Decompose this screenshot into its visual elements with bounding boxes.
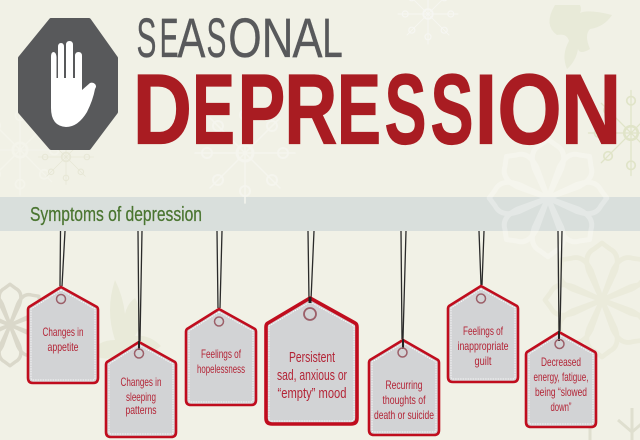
tag: decreased energy and fatigue: being “slowed	[535, 385, 587, 399]
tag: persistent sad, anxious or empty mood: “empty” mood	[278, 385, 346, 402]
tag: decreased energy and fatigue: down”	[550, 400, 572, 414]
title: depression: O	[497, 54, 562, 164]
title: depression: S	[385, 54, 426, 164]
tag: changes in sleeping patterns: sleeping	[126, 390, 156, 404]
tag: persistent sad, anxious or empty mood: sad, anxious or	[277, 367, 347, 384]
tag: decreased energy and fatigue: Decreased	[541, 355, 581, 369]
tag: feelings of inappropriate guilt: guilt	[474, 354, 492, 368]
tag: decreased energy and fatigue	[526, 231, 596, 427]
tag: recurring thoughts of death or suicide: Recurring	[386, 378, 422, 392]
title: depression: R	[284, 54, 337, 164]
icon: stop sign with hand	[20, 20, 116, 148]
tag: recurring thoughts of death or suicide: thoughts of	[382, 393, 426, 407]
tag: persistent sad, anxious or empty mood: Persistent	[289, 349, 336, 366]
title: depression: P	[238, 54, 285, 164]
title: seasonal: O	[228, 6, 262, 69]
heading: symptoms of depression: Symptoms of depression	[30, 204, 202, 226]
tag: feelings of hopelessness: Feelings of	[201, 347, 241, 361]
title: seasonal: S	[136, 6, 156, 69]
title: seasonal: S	[206, 6, 226, 69]
tag: changes in sleeping patterns: patterns	[126, 403, 156, 417]
tag: feelings of hopelessness: hopelessness	[197, 362, 245, 376]
title: seasonal: A	[177, 6, 206, 69]
tag: changes in appetite: appetite	[48, 340, 79, 354]
symptoms band	[0, 197, 640, 231]
tag: feelings of inappropriate guilt: Feelings of	[463, 324, 503, 338]
tag: feelings of inappropriate guilt	[448, 231, 518, 382]
tag: persistent sad, anxious or empty mood	[266, 231, 357, 424]
title: depression: I	[475, 54, 497, 164]
tag: feelings of inappropriate guilt: inappropriate	[458, 339, 509, 353]
tag: changes in sleeping patterns	[106, 231, 176, 437]
title: seasonal: A	[292, 6, 323, 69]
tag: recurring thoughts of death or suicide	[369, 231, 439, 435]
title: depression: N	[561, 54, 621, 164]
title: seasonal: L	[322, 6, 343, 69]
tag: recurring thoughts of death or suicide: death or suicide	[374, 408, 434, 422]
title: seasonal: E	[160, 6, 178, 69]
title: depression: S	[430, 54, 474, 164]
tag: decreased energy and fatigue: energy, fatigue,	[534, 370, 588, 384]
tag: changes in appetite	[28, 231, 98, 383]
tag: changes in appetite: Changes in	[42, 325, 84, 339]
tag: feelings of hopelessness	[186, 231, 256, 405]
title: seasonal: N	[262, 6, 293, 69]
title: depression: E	[192, 54, 235, 164]
tag: changes in sleeping patterns: Changes in	[120, 375, 162, 389]
title: depression: E	[337, 54, 381, 164]
title: depression: D	[133, 54, 192, 164]
